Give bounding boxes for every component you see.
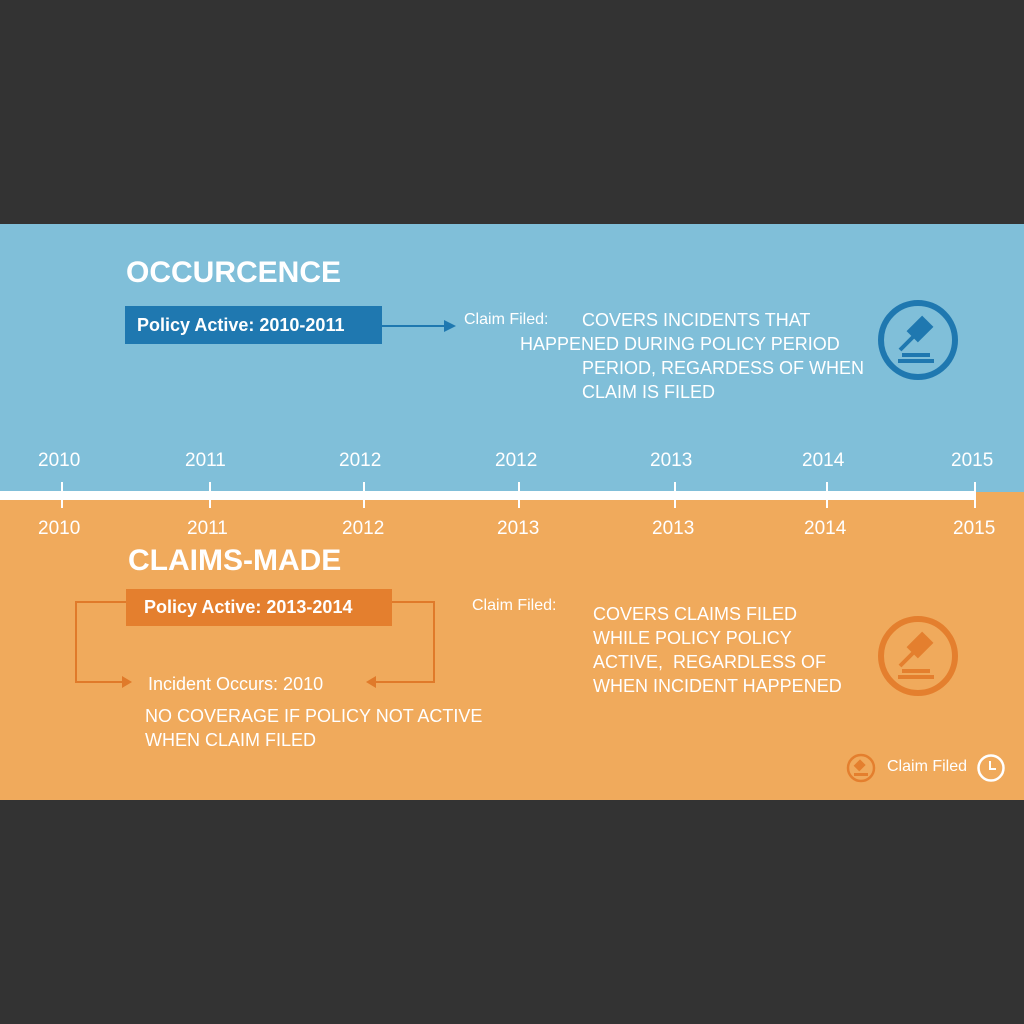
panel: occurrence (0, 224, 1024, 492)
text: claims-made description: WHEN INCIDENT HAPPENED (593, 676, 842, 696)
icon: small gavel (846, 754, 876, 782)
year labels top: 2012 (339, 450, 381, 471)
year labels bottom (38, 518, 995, 539)
year labels bottom: 2015 (953, 518, 995, 539)
arrow (382, 320, 456, 332)
text: claims-made description: ACTIVE, REGARDLESS OF (593, 652, 826, 672)
label: policy active 2013-2014 (126, 589, 392, 626)
text: occurrence description: CLAIM IS FILED (582, 382, 715, 402)
label: policy active 2013-2014: Policy Active: 2013-2014 (144, 597, 352, 617)
year labels top: 2012 (495, 450, 537, 471)
label: policy active 2010-2011: Policy Active: 2010-2011 (137, 315, 344, 335)
text: claims-made description: WHILE POLICY POLICY (593, 628, 792, 648)
text: claim filed: Claim Filed: (472, 597, 556, 614)
text: occurrence description: HAPPENED DURING POLICY PERIOD (520, 334, 840, 354)
text: no coverage: NO COVERAGE IF POLICY NOT ACTIVE (145, 706, 482, 726)
icon: gavel orange (878, 616, 958, 696)
panel: claims-made (0, 492, 1024, 800)
connector arrows (75, 601, 435, 688)
text: no coverage (145, 706, 482, 750)
legend: claim filed: Claim Filed (887, 758, 967, 775)
text: claim filed: Claim Filed: (464, 311, 548, 328)
year labels bottom: 2011 (187, 518, 228, 539)
year labels bottom: 2014 (804, 518, 846, 539)
year labels top: 2015 (951, 450, 993, 471)
heading: occurrence: OCCURCENCE (126, 256, 341, 289)
year labels top: 2011 (185, 450, 226, 471)
year labels bottom: 2012 (342, 518, 384, 539)
text: occurrence description: COVERS INCIDENTS THAT (582, 310, 810, 330)
year labels bottom: 2010 (38, 518, 80, 539)
year labels bottom: 2013 (652, 518, 694, 539)
year labels top: 2014 (802, 450, 844, 471)
text: claims-made description: COVERS CLAIMS FILED (593, 604, 797, 624)
text: no coverage: WHEN CLAIM FILED (145, 730, 316, 750)
text: incident occurs: Incident Occurs: 2010 (148, 674, 323, 694)
year labels top: 2013 (650, 450, 692, 471)
year labels top: 2010 (38, 450, 80, 471)
timeline axis (0, 482, 976, 508)
text: occurrence description: PERIOD, REGARDESS OF WHEN (582, 358, 864, 378)
text: claims-made description (593, 604, 842, 696)
legend: claim filed (846, 754, 1005, 782)
heading: claims-made: CLAIMS-MADE (128, 544, 341, 577)
icon: clock (977, 754, 1005, 782)
icon: gavel blue (878, 300, 958, 380)
text: occurrence description (520, 310, 864, 402)
label: policy active 2010-2011 (125, 306, 382, 344)
year labels bottom: 2013 (497, 518, 539, 539)
year labels top (38, 450, 993, 471)
